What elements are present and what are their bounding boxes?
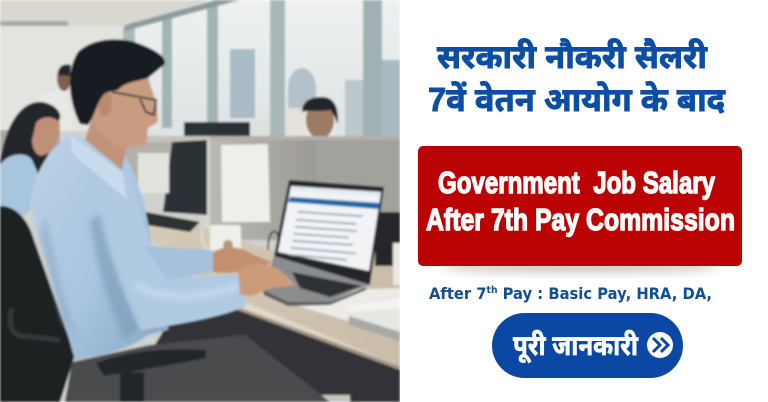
colleague far right bbox=[302, 97, 338, 142]
paper stack bbox=[349, 295, 400, 341]
subheading: pay components: After 7 bbox=[429, 284, 491, 303]
button: full details bbox=[492, 313, 683, 378]
panel: office photo bbox=[0, 0, 400, 402]
banner text bbox=[426, 165, 735, 237]
seated woman colleague bbox=[0, 102, 60, 240]
keyboard left bbox=[140, 212, 200, 232]
title: Hindi heading: सरकारी नौकरी सैलरी bbox=[437, 37, 708, 75]
button label: पूरी जानकारी bbox=[513, 329, 639, 363]
dark lower area under desk bbox=[120, 308, 400, 402]
icon: double chevron bbox=[647, 332, 673, 358]
main worker trousers bbox=[65, 335, 330, 402]
main worker hands bbox=[213, 247, 296, 296]
left monitor bbox=[163, 140, 207, 215]
banner shadow bbox=[440, 261, 720, 273]
back wall bbox=[0, 26, 125, 131]
back colleague standing bbox=[35, 64, 74, 131]
cubicle partitions bbox=[0, 130, 60, 180]
city skyline bbox=[230, 49, 255, 139]
windows bbox=[125, 0, 400, 140]
cables bbox=[268, 231, 280, 250]
chair bbox=[0, 206, 75, 402]
laptop bbox=[263, 180, 384, 306]
button background bbox=[492, 313, 683, 378]
main worker head bbox=[70, 39, 165, 170]
title: Hindi heading: 7वें वेतन आयोग के बाद bbox=[428, 80, 725, 118]
ceiling bbox=[0, 0, 200, 25]
panel: red banner bbox=[418, 146, 742, 273]
chair arm bbox=[96, 349, 206, 376]
title: Hindi heading bbox=[428, 37, 725, 118]
pinned paper bbox=[221, 144, 270, 222]
subheading: pay components: Pay : Basic Pay, HRA, DA, bbox=[498, 284, 712, 303]
banner background bbox=[418, 146, 742, 266]
speaker and white cup right bbox=[375, 212, 400, 266]
desk bbox=[136, 226, 400, 368]
main worker shirt bbox=[30, 134, 246, 360]
paper on desk bbox=[295, 288, 400, 325]
subheading: pay components: th bbox=[487, 285, 498, 296]
mug bbox=[202, 225, 241, 252]
far monitor bbox=[184, 122, 250, 137]
